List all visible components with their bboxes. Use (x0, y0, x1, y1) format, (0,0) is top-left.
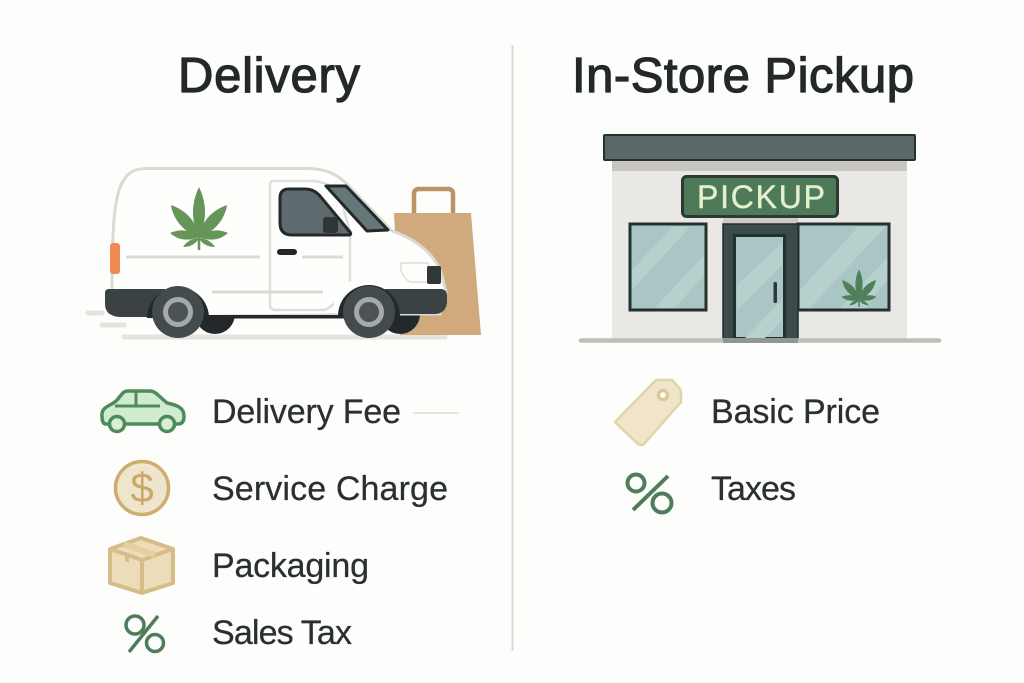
label: Taxes: Taxes (711, 470, 796, 508)
headlight (401, 263, 428, 282)
icon: percent (628, 474, 672, 512)
underbody (200, 315, 390, 318)
far-side wheels (195, 294, 420, 334)
side lines (126, 257, 343, 292)
left window (630, 224, 706, 310)
cannabis leaf logo (170, 187, 228, 250)
label: Basic Price: Basic Price (711, 393, 880, 431)
icon: dollar coin (116, 462, 168, 514)
window leaf (842, 269, 876, 307)
wheel arches (142, 276, 405, 312)
label: Service Charge: Service Charge (212, 470, 448, 508)
icon: car (102, 391, 184, 432)
door frame (723, 224, 798, 339)
rear wheel (147, 286, 209, 338)
wall (612, 160, 907, 340)
roof shadow (612, 160, 907, 171)
illustration: pickup storefront (581, 135, 939, 343)
delivery cost list (102, 391, 459, 652)
bumpers (105, 289, 447, 317)
pavement (581, 338, 939, 343)
label: Packaging: Packaging (212, 547, 369, 585)
icon: price tag (615, 380, 681, 445)
heading: Delivery: Delivery (178, 49, 360, 103)
door (734, 236, 784, 338)
sign (682, 176, 838, 216)
icon: percent (126, 616, 164, 652)
label: Delivery Fee: Delivery Fee (212, 393, 401, 431)
door outline (270, 181, 350, 310)
icon: box (110, 538, 173, 593)
speed lines and ground (88, 313, 445, 337)
pickup cost list (615, 380, 880, 512)
front wheel (338, 285, 400, 338)
windshield (326, 186, 388, 231)
door window (280, 189, 351, 235)
illustration: delivery van with paper bag (88, 168, 481, 338)
door handle (277, 249, 297, 255)
label: Sales Tax: Sales Tax (212, 614, 352, 652)
sign text: PICKUP (697, 179, 825, 215)
paper bag (394, 189, 481, 335)
mirror (323, 217, 338, 233)
door handle (774, 282, 777, 303)
van body (112, 168, 446, 317)
grille (427, 266, 441, 284)
tail light (110, 243, 120, 274)
sign shadow (723, 217, 798, 224)
roof (604, 135, 915, 160)
icon: dollar coin: $ (130, 464, 154, 511)
heading: In-Store Pickup: In-Store Pickup (572, 49, 914, 103)
right window (798, 224, 889, 310)
